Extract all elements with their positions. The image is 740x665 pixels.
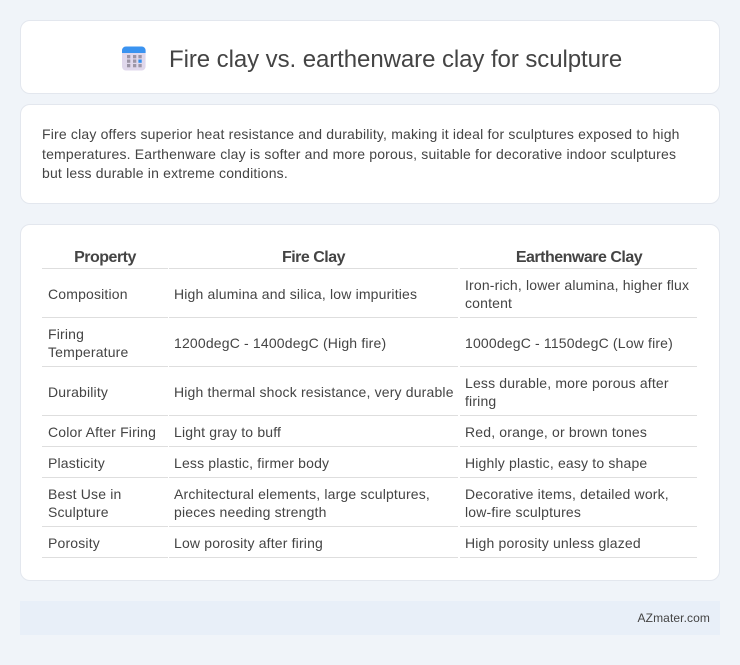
row: plasticity: Highly plastic, easy to shape (465, 455, 647, 471)
footer brand: AZmater.com (638, 611, 710, 625)
row: composition (48, 277, 689, 311)
row: firing temperature: Firing (48, 326, 84, 342)
intro text: but less durable in extreme conditions. (42, 165, 288, 181)
row: color after firing: Red, orange, or brown tones (465, 424, 647, 440)
row: firing temperature: 1000degC - 1150degC (Low fire) (465, 335, 673, 351)
table header: Property (74, 249, 136, 266)
panel: title card (20, 20, 720, 94)
row: plasticity: Plasticity (48, 455, 105, 471)
row: durability: firing (465, 393, 496, 409)
row: plasticity: Less plastic, firmer body (174, 455, 329, 471)
row: composition: content (465, 295, 512, 311)
row: firing temperature: 1200degC - 1400degC (High fire) (174, 335, 386, 351)
panel: introduction (20, 104, 720, 204)
row: durability: High thermal shock resistance, very durable (174, 384, 454, 400)
intro text: temperatures. Earthenware clay is softer and more porous, suitable for decorative indoor sculptures (42, 146, 676, 162)
row: durability (48, 375, 669, 409)
icon: calendar (122, 46, 146, 70)
row: color after firing (48, 424, 647, 440)
row: best use in sculpture: pieces needing strength (174, 504, 327, 520)
row: best use in sculpture: Best Use in (48, 486, 121, 502)
row: color after firing: Color After Firing (48, 424, 156, 440)
row: porosity: Low porosity after firing (174, 535, 323, 551)
row: firing temperature (48, 326, 673, 360)
row: color after firing: Light gray to buff (174, 424, 281, 440)
row: porosity (48, 535, 641, 551)
row: best use in sculpture: Decorative items, detailed work, (465, 486, 669, 502)
table header: Earthenware Clay (516, 249, 642, 266)
row: durability: Durability (48, 384, 108, 400)
intro text (42, 126, 680, 181)
row: porosity: High porosity unless glazed (465, 535, 641, 551)
row: plasticity (48, 455, 647, 471)
row: durability: Less durable, more porous after (465, 375, 669, 391)
row: composition: Composition (48, 286, 128, 302)
row: firing temperature: Temperature (48, 344, 128, 360)
footer bar (20, 601, 720, 635)
title: Fire clay vs. earthenware clay for sculpture (169, 46, 622, 73)
panel: comparison table (20, 224, 720, 581)
row: best use in sculpture (48, 486, 669, 520)
table header (74, 249, 642, 266)
row: composition: High alumina and silica, low impurities (174, 286, 417, 302)
intro text: Fire clay offers superior heat resistance and durability, making it ideal for sculptures exposed to high (42, 126, 680, 142)
row: best use in sculpture: Architectural elements, large sculptures, (174, 486, 430, 502)
row: best use in sculpture: Sculpture (48, 504, 109, 520)
row: composition: Iron-rich, lower alumina, higher flux (465, 277, 689, 293)
row: best use in sculpture: low-fire sculptures (465, 504, 581, 520)
row: porosity: Porosity (48, 535, 100, 551)
table header: Fire Clay (282, 249, 345, 266)
